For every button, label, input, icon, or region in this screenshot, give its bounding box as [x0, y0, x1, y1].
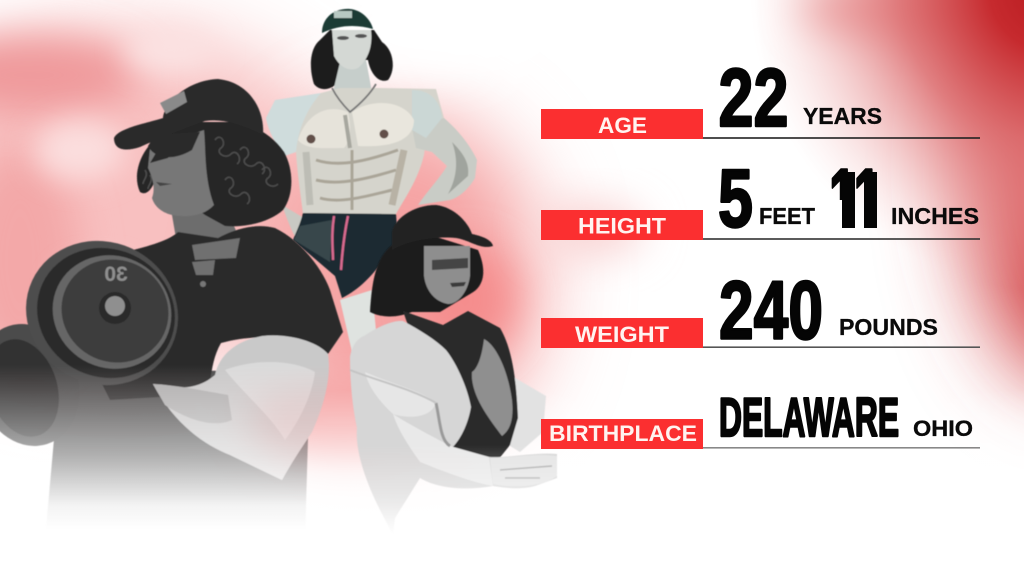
left arm	[266, 93, 321, 157]
front dumbbell plate	[25, 240, 178, 386]
head	[332, 30, 371, 70]
right edge glow	[965, 0, 1024, 390]
right forearm	[412, 118, 477, 205]
weight value: 240	[719, 264, 823, 356]
weight unit: POUNDS	[839, 314, 938, 340]
hair	[137, 122, 291, 226]
inches value	[832, 168, 877, 228]
stat row: age	[541, 51, 980, 144]
inches value: 11	[829, 152, 881, 244]
tank top	[403, 311, 518, 470]
feet value: 5	[718, 152, 753, 244]
shirt print	[192, 238, 240, 275]
shirt	[102, 225, 344, 400]
hand	[153, 384, 232, 423]
torso	[296, 88, 444, 214]
shorts	[293, 213, 398, 298]
feet unit: FEET	[759, 203, 815, 229]
cap	[392, 205, 493, 250]
figure: man in cap, right	[350, 205, 557, 535]
chest	[298, 109, 350, 148]
age value: 22	[718, 51, 788, 144]
tank print	[472, 339, 513, 436]
big arm	[350, 321, 557, 535]
figure: standing shirtless man, centre	[266, 9, 477, 352]
hair	[311, 30, 393, 89]
height label bar	[541, 210, 703, 240]
face	[148, 130, 214, 216]
drawstrings	[332, 216, 348, 270]
arm shading	[365, 372, 436, 417]
far arm	[509, 378, 546, 452]
weight label bar	[541, 318, 703, 348]
hair	[370, 235, 483, 316]
upper arm and forearm	[153, 335, 329, 480]
figure: man curling dumbbell, left	[0, 79, 343, 540]
plate number: 30	[104, 263, 128, 286]
birthplace label bar: BIRTHPLACE	[549, 421, 697, 446]
stat row: weight	[541, 264, 980, 356]
birthplace unit: OHIO	[913, 416, 973, 441]
age label bar	[541, 109, 703, 139]
stat row: height	[541, 168, 980, 240]
neck	[172, 205, 240, 250]
abs	[306, 150, 404, 210]
birthplace value: DELAWARE	[719, 386, 899, 448]
age label bar: AGE	[598, 113, 647, 138]
neck	[332, 60, 372, 96]
inches unit: INCHES	[891, 203, 979, 229]
face	[424, 246, 470, 304]
age unit: YEARS	[803, 103, 882, 129]
bottom white band	[0, 540, 1024, 579]
cap	[114, 79, 263, 150]
hair curls	[143, 137, 278, 204]
rear dumbbell plate	[0, 323, 62, 446]
stat row: birthplace	[541, 386, 980, 449]
hand	[490, 455, 557, 486]
weight label bar: WEIGHT	[575, 322, 670, 347]
height label bar: HEIGHT	[578, 214, 667, 238]
chain	[332, 84, 376, 112]
cap	[322, 9, 373, 33]
leg	[340, 290, 378, 352]
lower body	[48, 370, 308, 514]
